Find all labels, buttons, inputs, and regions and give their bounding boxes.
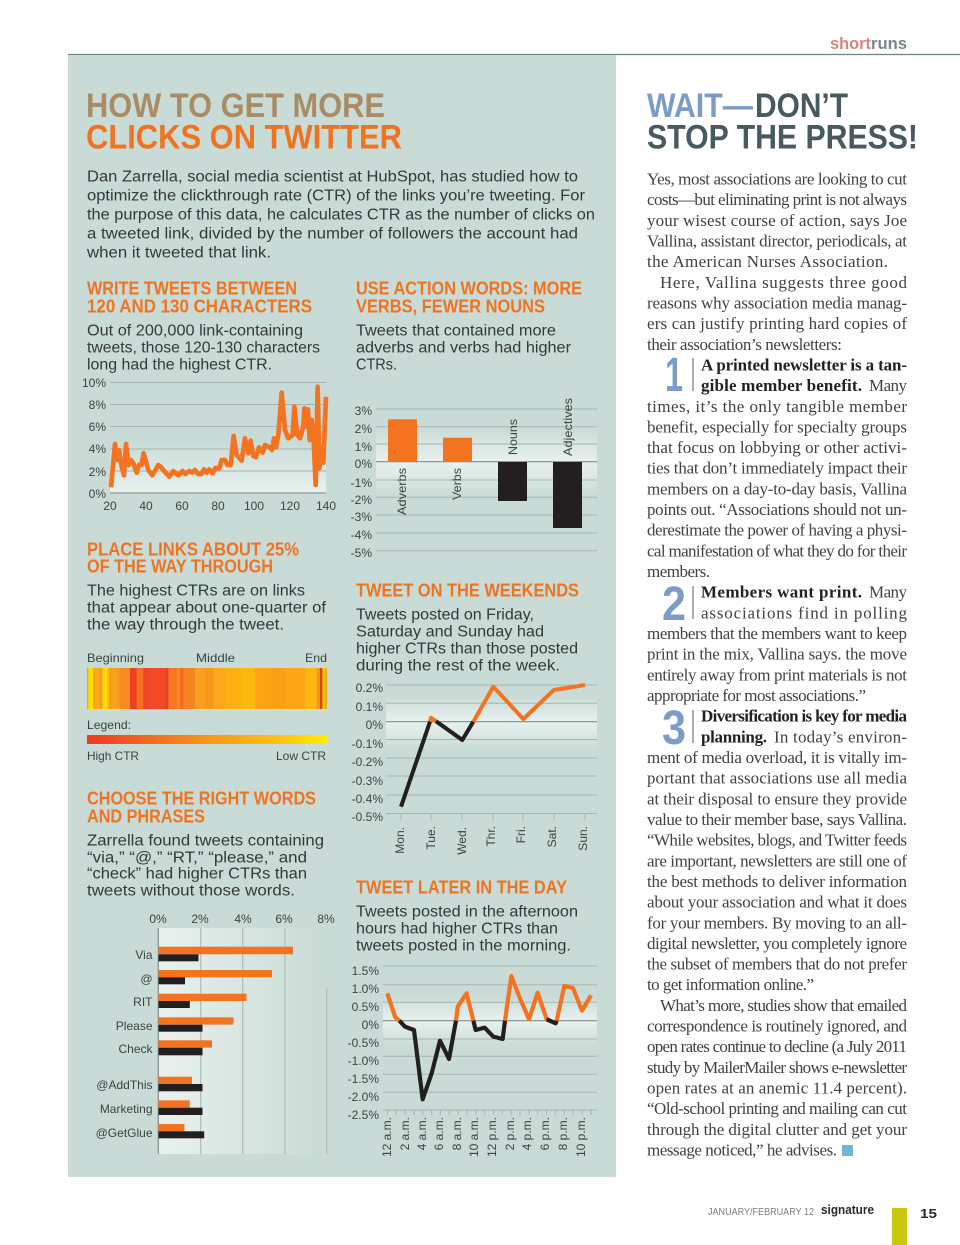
text: action words finding: CTRs. [356, 356, 397, 374]
text: word choice finding: “via,” “@,” “RT,” “please,” and [87, 850, 307, 866]
reason 3 text: value to their member base, says Vallina. [647, 810, 907, 829]
text: action words finding: adverbs and verbs had higher [356, 340, 571, 356]
reason 2 text: print in the mix, Vallina says. the move [647, 645, 907, 664]
paragraph: introduction: your wisest course of action, says Joe [647, 211, 907, 230]
text: character count finding [87, 322, 320, 374]
reason 3 text: the best methods to deliver information [647, 872, 908, 891]
line chart: CTR by hour: 8 p.m. [556, 1117, 570, 1150]
line chart: CTR by hour: -2.5% [348, 1108, 379, 1122]
horizontal bar chart: CTR by word: 2% [191, 912, 209, 926]
bar chart: parts of speech: -1% [351, 476, 372, 490]
line chart: CTR by hour: 8 a.m. [450, 1117, 464, 1150]
paragraph: conclusion: open rates continue to decline (a July 2011 [647, 1037, 907, 1056]
reason 3 text: the subset of members that do not prefer [647, 955, 907, 974]
reason 3 text: “While websites, blogs, and Twitter feeds [647, 831, 907, 850]
horizontal bar chart: CTR by word [96, 912, 335, 1154]
text: character count finding: long had the highest CTR. [87, 356, 272, 374]
bar chart: parts of speech: 3% [355, 404, 372, 418]
heading: wait, don't stop the press [647, 87, 918, 156]
horizontal bar chart: CTR by word: @GetGlue [96, 1126, 153, 1140]
line chart: CTR by hour: 6 a.m. [432, 1117, 446, 1150]
text: time of day finding: hours had higher CTRs than [356, 920, 558, 938]
line chart: CTR by character count: 0% [89, 487, 106, 501]
paragraph: introduction [647, 170, 908, 354]
text: time of day finding: tweets posted in the morning. [356, 938, 571, 954]
heading: how to get more clicks on Twitter: HOW TO GET MORE [86, 87, 385, 125]
paragraph: introduction: Vallina, assistant director, periodicals, at [647, 232, 907, 250]
reason 1 text: members on a day-to-day basis, Vallina [647, 479, 907, 498]
paragraph: introduction: the American Nurses Association. [647, 252, 888, 271]
reason 1 text: Many [869, 376, 908, 395]
line chart: CTR by character count: 10% [82, 376, 106, 390]
horizontal bar chart: CTR by word: @ [140, 972, 152, 986]
paragraph: conclusion [647, 996, 908, 1160]
reason 2 text: entirely away from print materials is not [647, 665, 907, 684]
reason 3 text: at their disposal to ensure they provide [647, 789, 907, 808]
bar chart: parts of speech: Adjectives [561, 398, 575, 456]
numeral 1: 1 [665, 349, 683, 402]
heat map: link position vs CTR: Middle [196, 651, 235, 665]
line chart: CTR by day of week: -0.1% [352, 737, 383, 751]
intro text block: when it tweeted that link. [86, 244, 271, 262]
heat map: link position vs CTR: Legend: [87, 718, 131, 732]
line chart: CTR by day of week: Fri. [514, 826, 528, 843]
text: weekend finding: higher CTRs than those posted [356, 640, 578, 658]
bar chart: parts of speech: Adverbs [395, 468, 409, 515]
line chart: CTR by hour: 2 p.m. [503, 1117, 517, 1150]
line chart: CTR by hour: -1.5% [348, 1072, 379, 1086]
heading: write tweets between 120 and 130 characters [87, 278, 312, 316]
reason 1 text: gible member benefit. [701, 376, 862, 395]
text: link placement finding: the way through the tweet. [87, 616, 284, 634]
bar chart: parts of speech: Nouns [506, 419, 520, 455]
heading: how to get more clicks on Twitter [86, 87, 402, 156]
paragraph: conclusion: study by MailerMailer shows e-newsletter [647, 1058, 907, 1077]
reason 2 text: Many [869, 583, 908, 602]
footer: JANUARY/FEBRUARY 12 [708, 1207, 814, 1218]
line chart: CTR by day of week: -0.3% [352, 774, 383, 788]
line chart: CTR by day of week: -0.5% [352, 810, 383, 824]
bar chart: parts of speech: 0% [355, 457, 372, 471]
line chart: CTR by hour: 10 a.m. [467, 1117, 481, 1157]
heat map: link position vs CTR: Low CTR [276, 749, 326, 763]
line chart: CTR by character count: 20 [103, 499, 117, 513]
intro text block: the purpose of this data, he calculates CTR as the number of clicks on [87, 206, 595, 224]
heading: use action words: VERBS, FEWER NOUNS [356, 296, 545, 316]
line chart: CTR by day of week: 0.2% [356, 681, 383, 695]
line chart: CTR by hour: 12 p.m. [485, 1117, 499, 1157]
reason 1 text [647, 355, 908, 581]
text: weekend finding: Tweets posted on Friday, [356, 606, 534, 624]
paragraph: introduction: ers can justify printing hard copies of [647, 314, 907, 333]
reason 3 text: for your members. By moving to an all- [647, 913, 907, 932]
reason 1 text: cal manifestation of what they do for their [647, 541, 907, 560]
horizontal bar chart: CTR by word: 4% [234, 912, 252, 926]
heading: wait, don't stop the press: WAIT— [647, 87, 753, 125]
line chart: CTR by character count [82, 376, 336, 513]
heading: tweet on the weekends: TWEET ON THE WEEKENDS [356, 580, 579, 600]
heading: wait, don't stop the press: DON’T [755, 87, 848, 125]
heading: write tweets between 120 and 130 characters: 120 AND 130 CHARACTERS [87, 296, 312, 316]
line chart: CTR by character count: 40 [139, 499, 153, 513]
line chart: CTR by day of week: 0.1% [356, 700, 383, 714]
line chart: CTR by hour: 10 p.m. [574, 1117, 588, 1157]
bar chart: parts of speech: -5% [351, 546, 372, 560]
line chart: CTR by hour: 4 p.m. [520, 1117, 534, 1150]
heading: choose the right words and phrases: CHOOSE THE RIGHT WORDS [87, 788, 316, 808]
line chart: CTR by hour: 12 a.m. [380, 1117, 394, 1157]
heat map: link position vs CTR [87, 651, 328, 763]
panel: how to get more clicks on Twitter [68, 55, 616, 1177]
paragraph: conclusion: open rates at an anemic 11.4 percent). [647, 1078, 907, 1098]
reason 1 text: that focus on lobbying or other activi- [647, 438, 907, 457]
reason 3 text: digital newsletter, you completely ignore [647, 934, 907, 953]
reason 3 text [647, 707, 908, 994]
paragraph: conclusion: correspondence is routinely ignored, and [647, 1017, 908, 1036]
intro text block: Dan Zarrella, social media scientist at HubSpot, has studied how to [87, 168, 578, 186]
reason 2 text: appropriate for most associations.” [647, 686, 866, 705]
paragraph: conclusion: message noticed,” he advises. [647, 1140, 837, 1160]
line chart: CTR by character count: 6% [89, 420, 106, 434]
line chart: CTR by day of week: Sat. [545, 826, 559, 847]
bar chart: parts of speech: -2% [351, 493, 372, 507]
line chart: CTR by character count: 80 [211, 499, 225, 513]
line chart: CTR by day of week [352, 681, 597, 855]
heading: how to get more clicks on Twitter: CLICKS ON TWITTER [86, 118, 402, 156]
section label: shortruns: runs [871, 34, 907, 53]
text: time of day finding [356, 904, 578, 954]
text: weekend finding: during the rest of the week. [356, 658, 560, 674]
bar chart: parts of speech: 2% [355, 422, 372, 436]
reason 1 text: members. [647, 562, 710, 581]
bar chart: parts of speech: -4% [351, 528, 372, 542]
line chart: CTR by hour: -2.0% [348, 1090, 379, 1104]
paragraph: introduction: costs—but eliminating print is not always [647, 190, 907, 209]
bar chart: parts of speech: Verbs [450, 468, 464, 500]
text: word choice finding: Zarrella found tweets containing [87, 832, 324, 850]
heading: place links about 25% of the way through: OF THE WAY THROUGH [87, 556, 273, 576]
line chart: CTR by hour: 1.5% [352, 964, 379, 978]
line chart: CTR by character count: 120 [280, 499, 300, 513]
line chart: CTR by hour: 2 a.m. [398, 1117, 412, 1150]
horizontal bar chart: CTR by word: 0% [149, 912, 167, 926]
section label: shortruns: short [830, 34, 871, 53]
intro text block: optimize the clickthrough rate (CTR) of the links you’re tweeting. For [87, 188, 585, 204]
end mark [842, 1145, 853, 1156]
text: time of day finding: Tweets posted in the afternoon [356, 904, 578, 920]
heat map: link position vs CTR: High CTR [87, 749, 139, 763]
text: action words finding: Tweets that contained more [356, 322, 556, 340]
line chart: CTR by day of week: Wed. [455, 827, 469, 855]
horizontal bar chart: CTR by word: 6% [275, 912, 293, 926]
horizontal bar chart: CTR by word: Please [116, 1019, 153, 1033]
text: link placement finding: The highest CTRs are on links [87, 582, 305, 600]
line chart: CTR by character count: 100 [244, 499, 264, 513]
line chart: CTR by day of week: -0.4% [352, 792, 383, 806]
line chart: CTR by character count: 140 [316, 499, 336, 513]
reason 1 text: A printed newsletter is a tan- [701, 355, 907, 374]
footer [708, 1202, 937, 1245]
line chart: CTR by day of week: -0.2% [352, 755, 383, 769]
reason 1 text: ties that don’t immediately impact their [647, 459, 907, 478]
line chart: CTR by hour: -1.0% [348, 1054, 379, 1068]
horizontal bar chart: CTR by word: Marketing [100, 1102, 152, 1116]
heading: choose the right words and phrases: AND PHRASES [87, 806, 205, 826]
line chart: CTR by hour: 4 a.m. [415, 1117, 429, 1150]
paragraph: conclusion: What’s more, studies show that emailed [660, 996, 908, 1015]
line chart: CTR by character count: 4% [89, 442, 106, 456]
paragraph: introduction: their association’s newsletters: [647, 335, 842, 354]
reason 3 text: ment of media overload, it is vitally im- [647, 748, 907, 767]
reason 1 text: times, it’s the only tangible member [647, 397, 907, 416]
text: word choice finding [87, 832, 324, 900]
text: action words finding [356, 322, 571, 374]
footer: signature [821, 1202, 874, 1217]
heat map: link position vs CTR: End [305, 651, 327, 665]
reason 2 text: Members want print. [701, 583, 862, 602]
text: character count finding: tweets, those 120-130 characters [87, 340, 320, 356]
line chart: CTR by day of week: Tue. [424, 826, 438, 850]
intro text block: a tweeted link, divided by the number of followers the account had [87, 226, 578, 242]
text: word choice finding: “check” had higher CTRs than [87, 866, 307, 882]
heading: place links about 25% of the way through [87, 540, 299, 576]
intro text block [86, 168, 595, 262]
horizontal bar chart: CTR by word: Check [118, 1042, 153, 1056]
horizontal bar chart: CTR by word: Via [135, 948, 153, 962]
bar chart: parts of speech [351, 398, 597, 560]
text: link placement finding: that appear about one-quarter of [87, 600, 327, 616]
line chart: CTR by day of week: 0% [366, 718, 383, 732]
heading: write tweets between 120 and 130 characters: WRITE TWEETS BETWEEN [87, 278, 297, 298]
footer: 15 [920, 1206, 937, 1221]
heat map: link position vs CTR: Beginning [87, 651, 144, 665]
paragraph: introduction: Here, Vallina suggests three good [660, 273, 908, 292]
line chart: CTR by day of week: Sun. [576, 826, 590, 851]
bar chart: parts of speech: 1% [355, 440, 372, 454]
text: word choice finding: tweets without those words. [87, 882, 295, 900]
horizontal bar chart: CTR by word: @AddThis [96, 1078, 152, 1092]
line chart: CTR by day of week: Mon. [393, 827, 407, 854]
heading: use action words: USE ACTION WORDS: MORE [356, 278, 582, 298]
paragraph: conclusion: “Old-school printing and mailing can cut [647, 1099, 907, 1118]
horizontal bar chart: CTR by word: RIT [133, 995, 153, 1009]
line chart: CTR by character count: 2% [89, 465, 106, 479]
reason 2 text: associations find in polling [701, 603, 908, 622]
paragraph: conclusion: through the digital clutter and get your [647, 1120, 907, 1139]
reason 3 text: In today’s environ- [774, 727, 907, 746]
bar chart: parts of speech: -3% [351, 510, 372, 524]
line chart: CTR by hour: 0% [362, 1018, 379, 1032]
line chart: CTR by hour: 1.0% [352, 982, 379, 996]
reason 1 text: benefit, especially for specialty groups [647, 417, 907, 436]
heading: place links about 25% of the way through: PLACE LINKS ABOUT 25% [87, 540, 299, 560]
paragraph: introduction: Yes, most associations are looking to cut [647, 170, 907, 188]
reason 2 text: members that the members want to keep [647, 624, 907, 643]
heading: tweet later in the day: TWEET LATER IN THE DAY [356, 878, 567, 898]
horizontal bar chart: CTR by word: 8% [317, 912, 335, 926]
line chart: CTR by character count: 60 [175, 499, 189, 513]
reason 3 text: Diversification is key for media [701, 707, 908, 726]
line chart: CTR by hour: 0.5% [352, 1000, 379, 1014]
line chart: CTR by day of week: Thr. [484, 826, 498, 847]
text: weekend finding [356, 606, 578, 674]
line chart: CTR by hour: 6 p.m. [538, 1117, 552, 1150]
line chart: CTR by character count: 8% [89, 398, 106, 412]
article text column [647, 170, 908, 1160]
reason 3 text: portant that associations use all media [647, 769, 907, 788]
text: weekend finding: Saturday and Sunday had [356, 624, 544, 640]
reason 3 text: to get information online.” [647, 975, 814, 994]
line chart: CTR by hour [348, 964, 597, 1157]
paragraph: introduction: reasons why association media manag- [647, 294, 907, 312]
text: character count finding: Out of 200,000 link-containing [87, 322, 303, 340]
line chart: CTR by hour: -0.5% [348, 1036, 379, 1050]
reason 3 text: planning. [701, 727, 767, 746]
reason 3 text: are important, newsletters are still one of [647, 851, 907, 870]
numeral 3: 3 [662, 702, 686, 755]
heading: choose the right words and phrases [87, 788, 316, 826]
reason 3 text: about your association and what it does [647, 893, 907, 912]
reason 1 text: derestimate the power of having a physi- [647, 521, 907, 540]
reason 2 text [647, 583, 908, 705]
text: link placement finding [87, 582, 327, 634]
heading: use action words [356, 278, 582, 316]
heading: wait, don't stop the press: STOP THE PRESS! [647, 118, 918, 156]
section label: shortruns [830, 34, 907, 53]
reason 1 text: points out. “Associations should not un- [647, 500, 907, 519]
numeral 2: 2 [662, 578, 686, 631]
